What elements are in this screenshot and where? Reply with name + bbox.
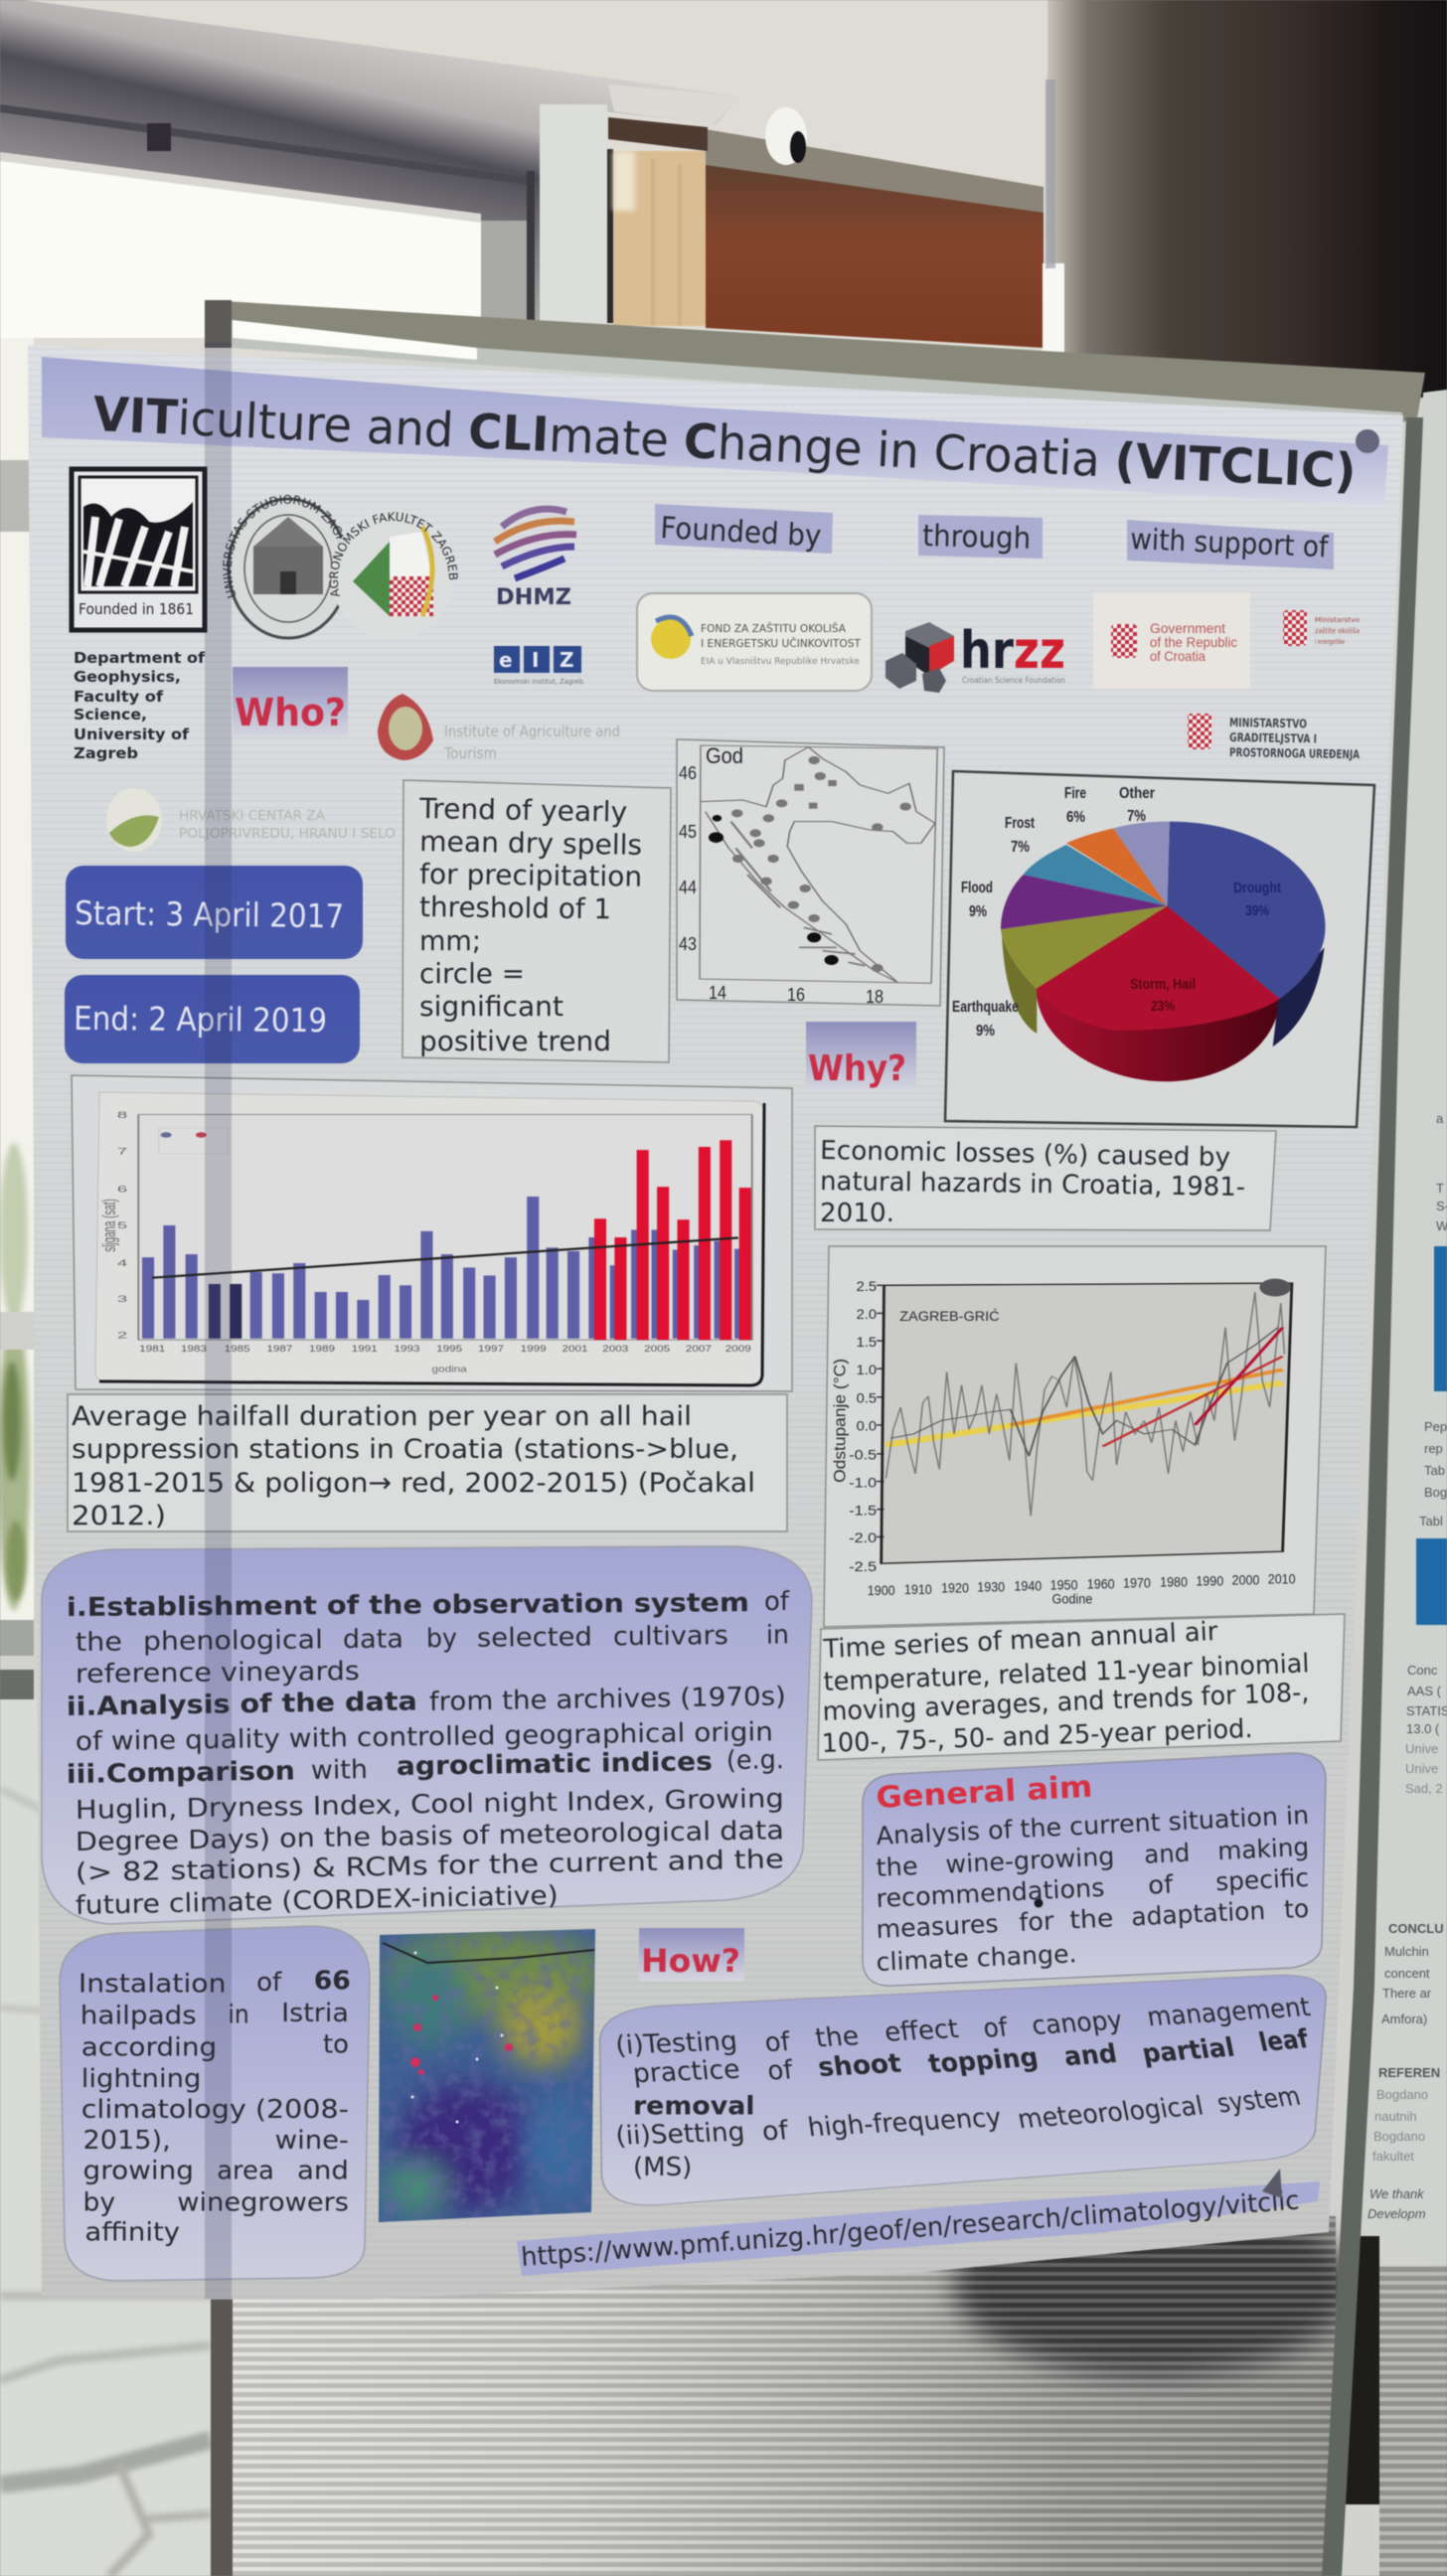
logo: government of the republic of Croatia <box>1093 592 1250 689</box>
department text: Faculty of <box>74 688 164 706</box>
caption: economic losses: natural hazards in Croatia, 1981- <box>820 1167 1245 1203</box>
panel: canopy management and MS: management <box>1145 1992 1313 2032</box>
department text: Department of <box>74 649 205 667</box>
pie chart panel: economic losses: 7% <box>1011 839 1030 856</box>
bar chart: average hailfall duration: 2009 <box>725 1345 751 1355</box>
line chart: Zagreb-Grič temperature: 2.0 <box>857 1307 877 1322</box>
line chart: Zagreb-Grič temperature: 0.5 <box>857 1390 877 1406</box>
logo: EIZ: Ekonomski institut, Zagreb <box>494 678 584 686</box>
pie chart panel: economic losses: Storm, Hail <box>1130 976 1196 993</box>
panel: general aim <box>863 1753 1326 1986</box>
map of Croatia with trend stations: 45 <box>679 822 697 842</box>
logo: faculty of agriculture seal: AGRONOMSKI FAKULTET ZAGREB <box>328 511 459 597</box>
logo: small crest with ministry name: zaštite okoliša <box>1315 627 1360 635</box>
line chart: Zagreb-Grič temperature: 1960 <box>1087 1576 1115 1592</box>
neighbouring poster at right: Unive <box>1405 1761 1438 1776</box>
department text: Zagreb <box>74 744 138 762</box>
text box: trend of dry spells: threshold of 1 <box>419 890 611 925</box>
panel: general aim: making <box>1216 1833 1310 1865</box>
pie chart panel: economic losses: 7% <box>1127 808 1146 825</box>
panel: general aim: General aim <box>876 1770 1093 1816</box>
panel: canopy management and MS: (i)Testing <box>614 2026 738 2061</box>
bar chart: average hailfall duration: 4 <box>117 1259 127 1269</box>
map of Croatia with trend stations: 14 <box>709 983 726 1003</box>
panel: canopy management and MS: leaf <box>1256 2023 1312 2058</box>
panel: observation system and analysis <box>42 1546 812 1924</box>
panel: canopy management and MS: effect <box>883 2013 960 2047</box>
neighbouring poster at right: Pep <box>1424 1419 1447 1434</box>
panel: canopy management and MS: system <box>1213 2081 1304 2119</box>
logo: ministry of construction: PROSTORNOGA UREĐENJA <box>1229 745 1361 761</box>
pie chart panel: economic losses: Flood <box>961 880 993 896</box>
pie chart panel: economic losses: Earthquake <box>952 999 1019 1016</box>
bar chart: average hailfall duration: 2001 <box>562 1345 587 1355</box>
floor tiles <box>0 1699 211 2576</box>
logo: hrzz: hrzz <box>960 621 1065 681</box>
neighbouring poster at right: Developm <box>1367 2206 1426 2221</box>
panel: canopy management and MS: (MS) <box>633 2153 692 2182</box>
panel: observation system and analysis: of wine quality with controlled geographical origin <box>76 1717 773 1757</box>
department text: Science, <box>74 706 147 724</box>
logo: croatian centre for agriculture: POLJOPRIVREDU, HRANU I SELO <box>179 827 396 842</box>
end date pill: End: 2 April 2019 <box>74 999 327 1040</box>
logo: institute of agriculture and tourism <box>378 694 620 762</box>
caption: temperature time series <box>818 1614 1345 1760</box>
logo: EIZ: Z <box>560 648 574 672</box>
panel: canopy management and MS: topping <box>926 2042 1041 2079</box>
bar chart: average hailfall duration <box>72 1075 792 1391</box>
neighbouring poster at right: Bog <box>1424 1485 1447 1500</box>
panel: hailpads installation: 2015), <box>83 2125 171 2156</box>
panel: general aim: of <box>1148 1869 1175 1900</box>
label: with support of: with support of <box>1130 522 1330 564</box>
neighbouring poster at right: There ar <box>1382 1986 1432 2001</box>
bar chart: average hailfall duration: 6 <box>117 1185 127 1195</box>
panel: hailpads installation: area <box>217 2156 274 2185</box>
bar chart: average hailfall duration: sljgana (sat) <box>100 1199 120 1252</box>
logo: government of the republic of Croatia: Government <box>1150 620 1225 636</box>
logo: faculty of science, founded in 1861: Founded in 1861 <box>79 600 194 618</box>
panel: canopy management and MS: of <box>766 2055 795 2086</box>
department text: Geophysics, <box>74 668 181 686</box>
label: how <box>639 1928 744 1981</box>
panel: canopy management and MS: meteorological <box>1015 2091 1206 2135</box>
panel: canopy management and MS: of <box>981 2012 1011 2043</box>
logo: environmental protection fund: EIA u Vlasništvu Republike Hrvatske <box>701 656 860 667</box>
line chart: Zagreb-Grič temperature: 1940 <box>1014 1578 1042 1593</box>
text box: trend of dry spells: mean dry spells <box>419 825 642 862</box>
photo marks on the sheet <box>1034 429 1379 2198</box>
panel: observation system and analysis: Degree Days) on the basis of meteorological data <box>76 1816 784 1857</box>
panel: general aim: and <box>1144 1839 1191 1869</box>
text box: trend of dry spells: positive trend <box>419 1025 611 1057</box>
logo: hrzz: Croatian Science Foundation <box>962 676 1065 685</box>
bar chart: average hailfall duration: 1983 <box>181 1345 207 1355</box>
line chart: Zagreb-Grič temperature: 2.5 <box>857 1279 877 1294</box>
panel: hailpads installation: 66 <box>314 1966 351 1996</box>
project URL band: https://www.pmf.unizg.hr/geof/en/research/climatology/vitclic <box>520 2186 1300 2273</box>
text box: trend of dry spells: mm; <box>419 924 481 957</box>
logo: ministry of construction: GRADITELJSTVA I <box>1229 730 1317 746</box>
neighbouring poster at right: Tab <box>1424 1463 1445 1478</box>
bar chart: average hailfall duration: 1997 <box>478 1345 504 1355</box>
panel: observation system and analysis: future climate (CORDEX-iniciative) <box>76 1881 559 1921</box>
line chart: Zagreb-Grič temperature: 1.5 <box>857 1335 877 1350</box>
panel: general aim: the <box>876 1852 918 1882</box>
panel: observation system and analysis: data <box>343 1625 403 1655</box>
logo: environmental protection fund: FOND ZA ZAŠTITU OKOLIŠA <box>701 622 846 635</box>
logo: government of the republic of Croatia: of the Republic <box>1150 634 1237 650</box>
line chart: Zagreb-Grič temperature: 1970 <box>1123 1575 1151 1590</box>
panel: canopy management and MS: practice <box>631 2054 741 2089</box>
panel: canopy management and MS: canopy <box>1030 2006 1125 2041</box>
satellite lightning density map <box>378 1928 606 2226</box>
logo: institute of agriculture and tourism: Institute of Agriculture and <box>444 723 620 740</box>
logo: croatian centre for agriculture <box>106 788 396 852</box>
line chart: Zagreb-Grič temperature: 2010 <box>1268 1571 1296 1587</box>
text box: trend of dry spells: Trend of yearly <box>418 792 627 829</box>
title band <box>42 357 1388 506</box>
line chart: Zagreb-Grič temperature: Odstupanje (°C) <box>830 1359 849 1483</box>
bar chart: average hailfall duration: 1985 <box>225 1345 250 1355</box>
pie chart panel: economic losses: 6% <box>1066 809 1085 826</box>
neighbouring poster at right <box>1342 390 1447 2576</box>
pie chart panel: economic losses: 39% <box>1245 902 1269 919</box>
caption: temperature time series: moving averages, and trends for 108-, <box>822 1678 1310 1727</box>
logo: croatian centre for agriculture: HRVATSKI CENTAR ZA <box>179 809 325 824</box>
panel: observation system and analysis: selected <box>477 1623 592 1654</box>
panel: hailpads installation: growing <box>83 2156 194 2185</box>
panel: hailpads installation <box>60 1926 370 2281</box>
label: how: How? <box>641 1942 740 1980</box>
map of Croatia with trend stations: 16 <box>787 985 805 1005</box>
caption: hailfall: 2012.) <box>72 1501 166 1531</box>
line chart: Zagreb-Grič temperature: 1950 <box>1050 1577 1077 1593</box>
line chart: Zagreb-Grič temperature: -2.5 <box>849 1559 877 1574</box>
department text <box>74 649 205 762</box>
pie chart panel: economic losses: Drought <box>1233 880 1281 896</box>
neighbouring poster at right: nautnih <box>1374 2109 1417 2124</box>
neighbouring poster at right: AAS ( <box>1407 1684 1442 1698</box>
label: why <box>806 1022 916 1090</box>
bar chart: average hailfall duration: 1991 <box>352 1345 378 1355</box>
label: who: Who? <box>235 691 346 734</box>
line chart: Zagreb-Grič temperature: -1.0 <box>849 1475 877 1490</box>
pie chart panel: economic losses: Frost <box>1005 815 1036 832</box>
panel: general aim: the <box>1069 1903 1114 1934</box>
panel: hailpads installation: Istria <box>281 1998 349 2028</box>
panel: hailpads installation: winegrowers <box>177 2187 349 2217</box>
panel: observation system and analysis: by <box>426 1624 457 1654</box>
label: why: Why? <box>808 1048 906 1089</box>
neighbouring poster at right: rep <box>1424 1441 1443 1456</box>
bar chart: average hailfall duration: 8 <box>117 1111 127 1120</box>
panel: general aim: to <box>1283 1894 1310 1924</box>
department text: University of <box>74 725 190 743</box>
neighbouring poster at right: a <box>1436 1111 1444 1126</box>
text box: trend of dry spells: for precipitation <box>419 858 642 893</box>
logo: small crest with ministry name <box>1283 610 1360 646</box>
neighbouring poster at right: Conc <box>1407 1663 1438 1678</box>
bar chart: average hailfall duration: 1989 <box>309 1345 335 1355</box>
line chart: Zagreb-Grič temperature: 1910 <box>904 1582 932 1597</box>
panel: canopy management and MS: the <box>813 2021 861 2053</box>
neighbouring poster at right: We thank <box>1369 2186 1425 2201</box>
line chart: Zagreb-Grič temperature <box>824 1246 1326 1627</box>
caption: hailfall <box>68 1394 787 1531</box>
logo: university seal: UNIVERSITAS STUDIORUM ZAGRABIENSIS <box>223 494 344 598</box>
panel: observation system and analysis: (> 82 stations) & RCMs for the current and the <box>76 1845 784 1888</box>
bar chart: average hailfall duration: 7 <box>117 1147 127 1157</box>
caption: economic losses: 2010. <box>820 1199 894 1228</box>
map of Croatia with trend stations: God <box>706 743 743 768</box>
caption: temperature time series: temperature, related 11-year binomial <box>823 1649 1310 1697</box>
caption: hailfall: suppression stations in Croatia (stations->blue, <box>72 1434 738 1465</box>
end date pill <box>65 975 360 1063</box>
bar chart: average hailfall duration: 1993 <box>394 1345 419 1355</box>
line chart: Zagreb-Grič temperature: 1980 <box>1160 1574 1188 1589</box>
start date pill: Start: 3 April 2017 <box>75 893 344 935</box>
line chart: Zagreb-Grič temperature: 0.0 <box>857 1418 877 1434</box>
panel: hailpads installation: in <box>228 2000 249 2029</box>
bar chart: average hailfall duration: 1987 <box>266 1345 292 1355</box>
label: through: through <box>922 519 1032 557</box>
window pillar <box>540 104 607 321</box>
bar chart: average hailfall duration: 5 <box>117 1221 127 1231</box>
logo: university seal <box>223 494 344 640</box>
neighbouring poster at right: REFEREN <box>1378 2065 1440 2080</box>
caption: temperature time series: 100-, 75-, 50- and 25-year period. <box>821 1714 1253 1759</box>
logo: faculty of science, founded in 1861 <box>72 469 205 630</box>
bar chart: average hailfall duration: 2 <box>117 1331 127 1341</box>
panel: general aim: wine-growing <box>945 1842 1115 1879</box>
logo: environmental protection fund <box>637 593 872 691</box>
caption: economic losses <box>815 1126 1276 1230</box>
map of Croatia with trend stations: 18 <box>866 987 884 1007</box>
panel: general aim: adaptation <box>1131 1896 1266 1931</box>
panel: canopy management and MS: partial <box>1140 2032 1237 2069</box>
panel: observation system and analysis: ii.Analysis of the data <box>67 1687 417 1722</box>
stand frame top and side <box>205 300 1425 2576</box>
panel: hailpads installation: to <box>323 2029 349 2059</box>
logo: ministry of construction: MINISTARSTVO <box>1229 716 1307 730</box>
bar chart: average hailfall duration: 2007 <box>686 1345 712 1355</box>
line chart: Zagreb-Grič temperature: 1930 <box>977 1579 1005 1595</box>
line chart: Zagreb-Grič temperature: -1.5 <box>849 1503 877 1519</box>
neighbouring poster at right: Tabl <box>1419 1514 1443 1529</box>
panel: general aim: for <box>1019 1906 1055 1937</box>
line chart: Zagreb-Grič temperature: 1990 <box>1196 1573 1223 1589</box>
neighbouring poster at right: 13.0 ( <box>1406 1721 1440 1736</box>
logo: ministry of construction <box>1188 714 1361 761</box>
panel: general aim: climate change. <box>876 1939 1077 1977</box>
bar chart: average hailfall duration: 1995 <box>436 1345 462 1355</box>
bar chart: average hailfall duration: 1999 <box>521 1345 547 1355</box>
corrugated panel below poster <box>233 2196 1352 2576</box>
map of Croatia with trend stations: 46 <box>679 763 697 783</box>
pie chart panel: economic losses: 9% <box>976 1023 995 1040</box>
logo: EIZ: I <box>532 648 539 672</box>
panel: observation system and analysis: cultivars <box>613 1621 728 1652</box>
caption: hailfall: Average hailfall duration per year on all hail <box>72 1401 692 1432</box>
panel: observation system and analysis: phenological <box>143 1625 323 1657</box>
panel: hailpads installation: wine- <box>275 2125 349 2156</box>
label: who <box>233 667 348 736</box>
panel: general aim: recommendations <box>876 1873 1105 1913</box>
concrete column <box>1043 0 1447 398</box>
panel: observation system and analysis: (e.g. <box>726 1745 784 1776</box>
panel: general aim: Analysis of the current situation in <box>876 1801 1310 1851</box>
title: VITiculture and CLImate Change in Croatia (VITCLIC) <box>91 387 1358 500</box>
panel: canopy management and MS <box>600 1975 1326 2205</box>
panel: canopy management and MS: of <box>760 2116 791 2147</box>
panel: observation system and analysis: reference vineyards <box>76 1657 360 1690</box>
line chart: Zagreb-Grič temperature: ZAGREB-GRIĆ <box>899 1309 1000 1324</box>
pie chart panel: economic losses <box>945 771 1374 1127</box>
panel: general aim: specific <box>1214 1863 1310 1896</box>
line chart: Zagreb-Grič temperature: Godine <box>1051 1591 1092 1606</box>
line chart: Zagreb-Grič temperature: 1900 <box>868 1583 895 1598</box>
bar chart: average hailfall duration: godina <box>432 1365 468 1374</box>
neighbouring poster at right: Amfora) <box>1381 2012 1427 2026</box>
panel: hailpads installation: according <box>81 2032 217 2062</box>
panel: observation system and analysis: i.Establishment of the observation system <box>67 1588 749 1623</box>
logo: EIZ: e <box>499 648 513 672</box>
panel: general aim: measures <box>876 1909 999 1944</box>
line chart: Zagreb-Grič temperature: 1920 <box>941 1580 969 1596</box>
neighbouring poster at right: CONCLU <box>1388 1921 1444 1936</box>
bar chart: average hailfall duration: 1981 <box>139 1345 165 1355</box>
neighbouring poster at right: T <box>1436 1181 1444 1196</box>
text box: trend of dry spells: circle = <box>419 957 525 990</box>
panel: canopy management and MS: shoot <box>816 2048 903 2083</box>
stand pole <box>211 2276 233 2576</box>
neighbouring poster at right: concent <box>1384 1966 1430 1981</box>
neighbouring poster at right: Mulchin <box>1384 1944 1429 1959</box>
pie chart panel: economic losses: Other <box>1119 785 1155 802</box>
text box: trend of dry spells: significant <box>419 990 563 1023</box>
panel: hailpads installation: by <box>83 2187 115 2217</box>
pie chart panel: economic losses: Fire <box>1064 785 1086 802</box>
pie chart panel: economic losses: 23% <box>1151 998 1175 1015</box>
panel: observation system and analysis: with <box>311 1755 368 1786</box>
caption: economic losses: Economic losses (%) caused by <box>820 1136 1230 1173</box>
map of Croatia with trend stations <box>677 739 944 1007</box>
logo: institute of agriculture and tourism: Tourism <box>443 744 497 762</box>
map of Croatia with trend stations: 44 <box>679 878 697 897</box>
caption: hailfall: 1981-2015 & poligon→ red, 2002-2015) (Počakal <box>72 1468 755 1499</box>
bar chart: average hailfall duration: 2003 <box>602 1345 628 1355</box>
text box: trend of dry spells <box>402 780 671 1062</box>
poster sheet <box>28 345 1403 2300</box>
neighbouring poster at right: Unive <box>1405 1741 1438 1756</box>
label: founded by: Founded by <box>660 511 822 554</box>
neighbouring poster at right: Sad, 2 <box>1405 1781 1443 1796</box>
panel: observation system and analysis: iii.Comparison <box>67 1756 295 1790</box>
panel: hailpads installation: Instalation <box>79 1969 226 1999</box>
panel: hailpads installation: and <box>297 2156 349 2185</box>
curtain <box>607 149 707 326</box>
brown wall <box>608 84 1044 348</box>
panel: canopy management and MS: of <box>763 2026 793 2058</box>
panel: hailpads installation: hailpads <box>80 2001 197 2030</box>
logo: DHMZ <box>495 509 576 610</box>
start date pill <box>66 866 363 959</box>
panel: canopy management and MS: high-frequency <box>806 2102 1003 2143</box>
panel: hailpads installation: affinity <box>84 2217 180 2247</box>
panel: observation system and analysis: Huglin, Dryness Index, Cool night Index, Growing <box>76 1784 784 1826</box>
line chart: Zagreb-Grič temperature: 2000 <box>1232 1572 1259 1588</box>
panel: observation system and analysis: in <box>766 1620 789 1651</box>
panel: canopy management and MS: (ii)Setting <box>614 2117 746 2152</box>
neighbouring poster at right: fakultet <box>1372 2149 1414 2164</box>
panel: observation system and analysis: from the archives (1970s) <box>429 1682 786 1717</box>
pie chart panel: economic losses: 9% <box>969 903 987 920</box>
logo: hrzz <box>885 621 1065 693</box>
logo: small crest with ministry name: Ministarstvo <box>1315 616 1360 624</box>
panel: observation system and analysis: agroclimatic indices <box>397 1747 713 1782</box>
panel: hailpads installation: lightning <box>81 2063 201 2094</box>
logo: government of the republic of Croatia: of Croatia <box>1150 648 1206 664</box>
logo: environmental protection fund: I ENERGETSKU UČINKOVITOST <box>701 637 861 650</box>
panel: observation system and analysis: the <box>76 1628 122 1658</box>
caption: temperature time series: Time series of mean annual air <box>822 1617 1218 1665</box>
line chart: Zagreb-Grič temperature: 1.0 <box>857 1363 877 1377</box>
panel: hailpads installation: climatology (2008- <box>81 2095 349 2125</box>
logo: EIZ <box>494 646 584 686</box>
security camera <box>765 107 807 165</box>
panel: canopy management and MS: and <box>1061 2038 1119 2072</box>
line chart: Zagreb-Grič temperature: -0.5 <box>849 1447 877 1463</box>
panel: canopy management and MS: removal <box>633 2091 755 2121</box>
neighbouring poster at right: Bogdano <box>1373 2129 1425 2144</box>
panel: hailpads installation: of <box>256 1968 282 1998</box>
bar chart: average hailfall duration: 2005 <box>644 1345 670 1355</box>
bar chart: average hailfall duration: 3 <box>117 1294 127 1304</box>
line chart: Zagreb-Grič temperature: -2.0 <box>849 1530 877 1545</box>
map of Croatia with trend stations: 43 <box>679 934 697 954</box>
stand pole seen through the poster <box>205 343 232 2299</box>
logo: small crest with ministry name: i energetike <box>1315 638 1345 646</box>
logo: DHMZ: DHMZ <box>496 585 571 610</box>
neighbouring poster at right: Bogdano <box>1376 2087 1428 2102</box>
panel: observation system and analysis: of <box>764 1587 790 1617</box>
